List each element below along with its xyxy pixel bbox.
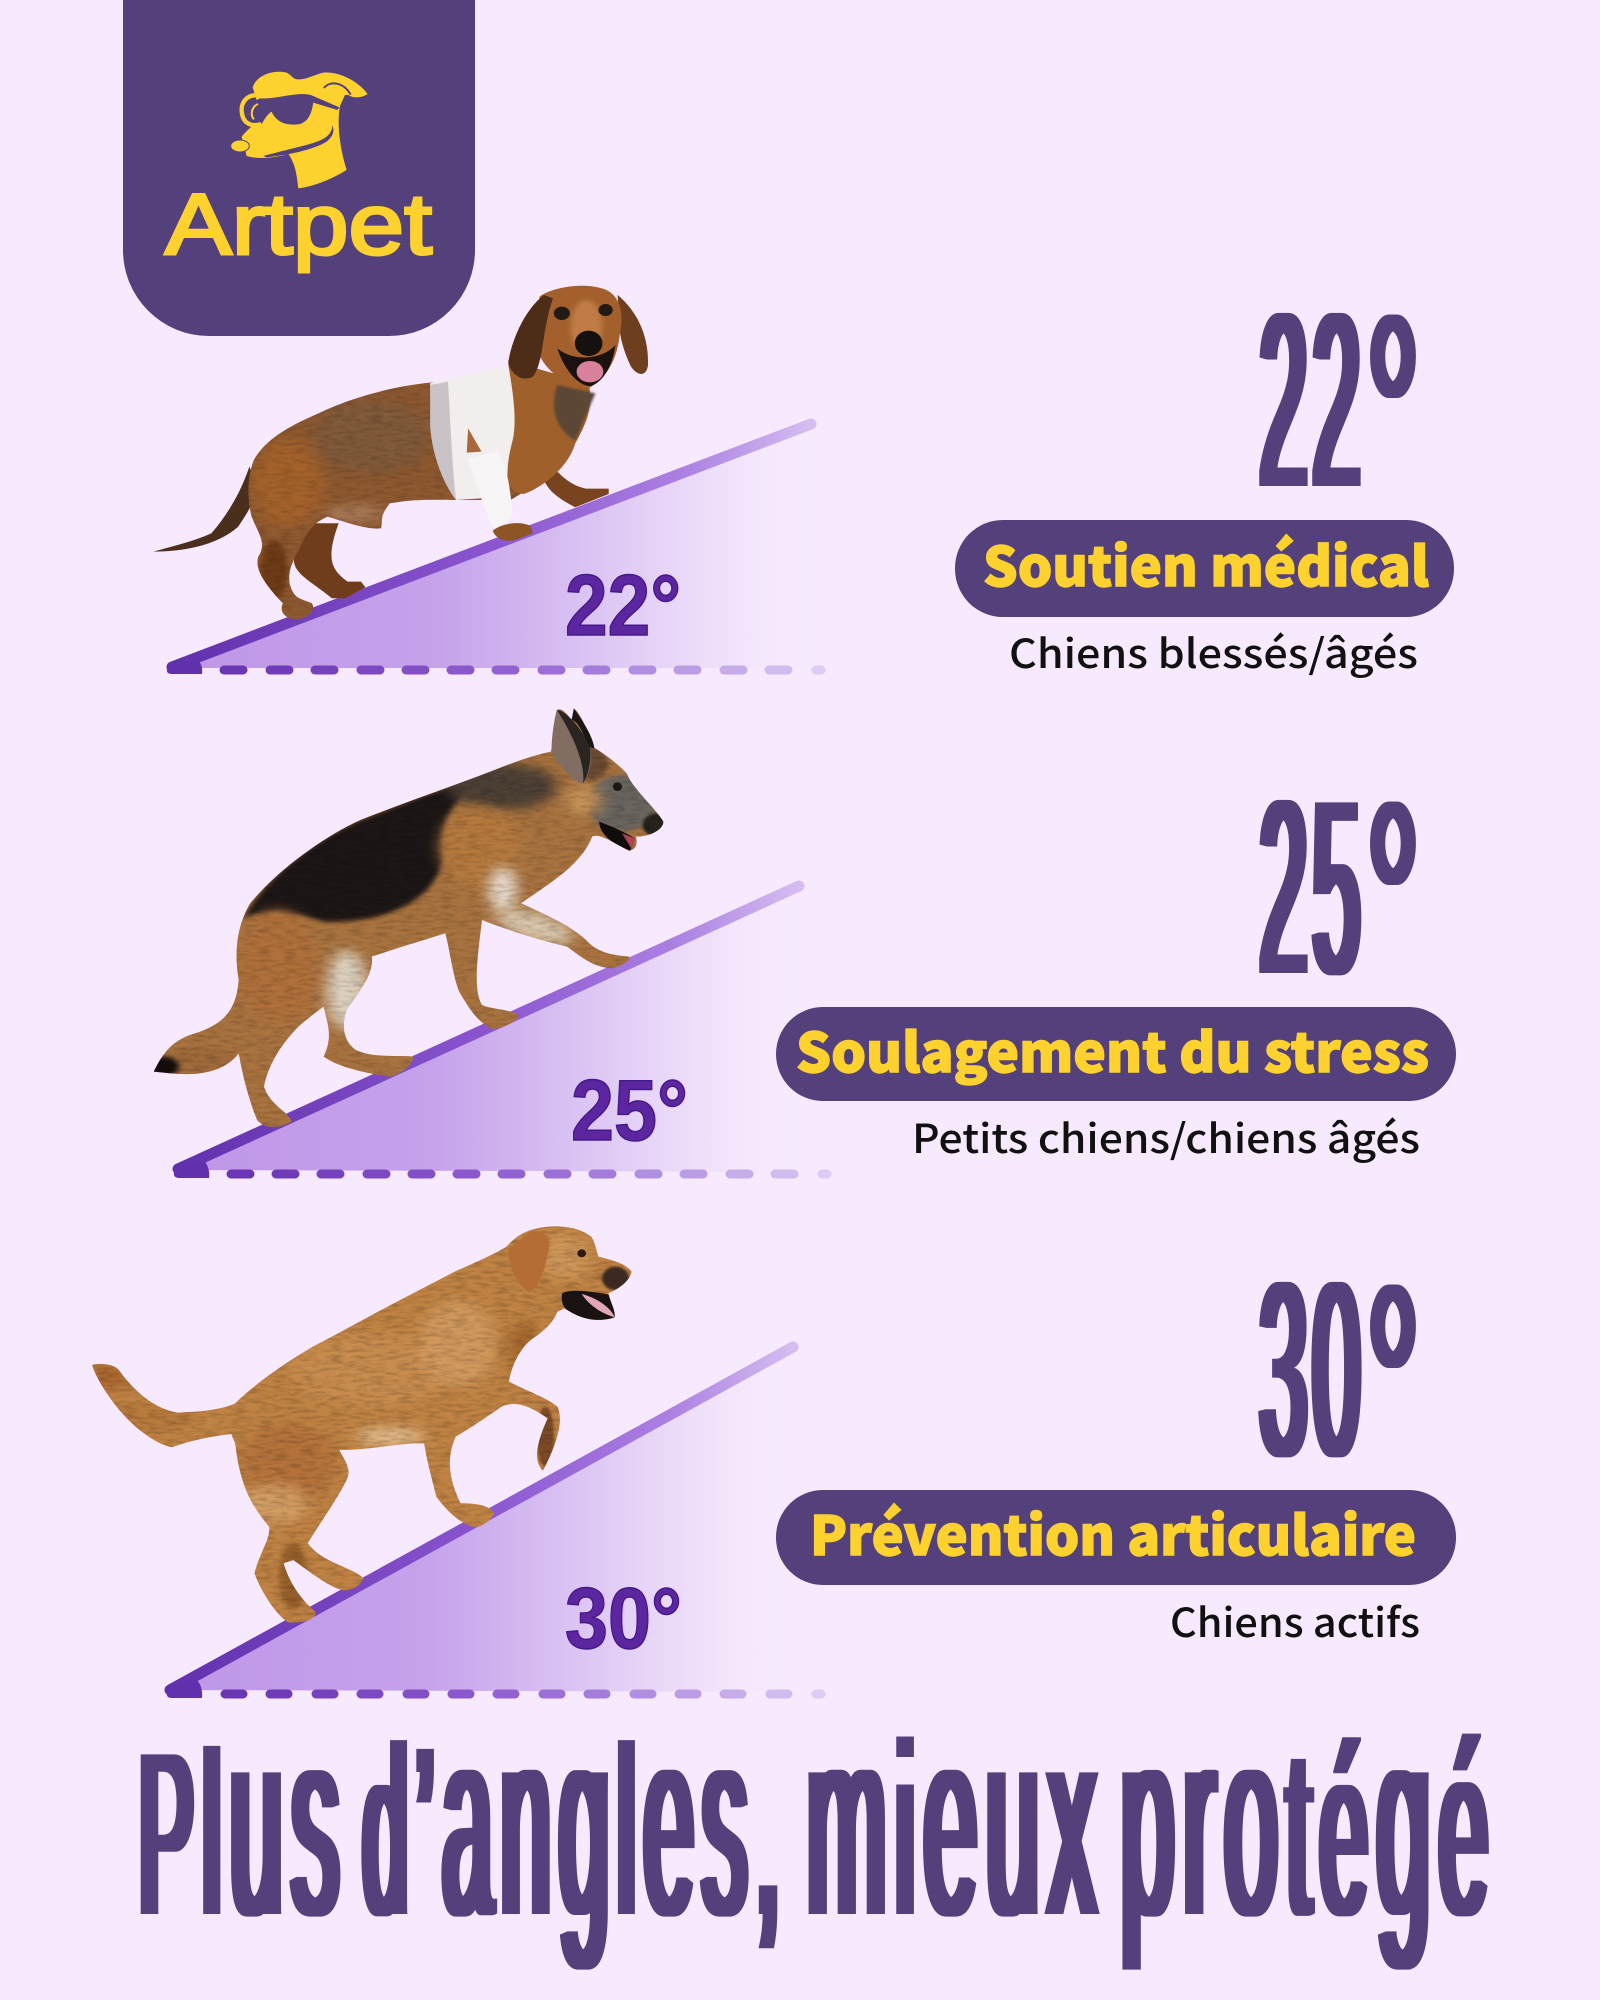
- logo background tab: [123, 0, 475, 336]
- ramp: 25 degrees: [174, 886, 827, 1178]
- big number 25 degrees: 25: [1260, 748, 1366, 1026]
- title: Plus: [139, 1671, 348, 1971]
- dog: golden retriever: [92, 1226, 632, 1623]
- pill: Soulagement du stress: Soulagement du stress: [796, 1009, 1429, 1088]
- big number 25 degrees: [1260, 739, 1420, 1075]
- sub text: chiens actifs: Chiens actifs: [1170, 1591, 1420, 1649]
- big number 30 degrees: [1260, 1222, 1420, 1558]
- ramp angle label: 22°: [565, 558, 681, 654]
- ramp angle label: 25°: [571, 1063, 688, 1159]
- sub text: petits chiens: Petits chiens/chiens âgés: [912, 1107, 1420, 1165]
- sub text: chiens blessés: Chiens blessés/âgés: [1009, 622, 1418, 680]
- big number 30 degrees: 30: [1260, 1230, 1366, 1508]
- pill: Soutien médical: Soutien médical: [983, 523, 1429, 602]
- ramp angle label: 30°: [565, 1571, 682, 1667]
- title: [139, 1671, 1497, 1973]
- big number 22 degrees: [1260, 252, 1420, 588]
- infographic canvas: °: [1366, 739, 1420, 1075]
- icon: dog with sunglasses: [231, 72, 368, 188]
- big number 22 degrees: 22: [1260, 261, 1366, 539]
- ramp: 30 degrees: [167, 1347, 821, 1698]
- infographic canvas: °: [1366, 1222, 1420, 1558]
- pill: Prévention articulaire: Prévention articulaire: [810, 1492, 1416, 1571]
- dog: bandaged dachshund: [153, 286, 648, 637]
- dog: German shepherd: [154, 708, 664, 1128]
- panel: logo: [123, 0, 475, 336]
- logo wordmark: Artpet: [165, 177, 432, 273]
- neck and chest: [506, 360, 590, 494]
- ramp: 22 degrees: [167, 424, 835, 674]
- title: protégé: [1121, 1671, 1497, 1973]
- bandage: [430, 365, 515, 528]
- title: d’angles,: [363, 1671, 789, 1973]
- title: mieux: [807, 1671, 1105, 1971]
- infographic canvas: °: [1366, 252, 1420, 588]
